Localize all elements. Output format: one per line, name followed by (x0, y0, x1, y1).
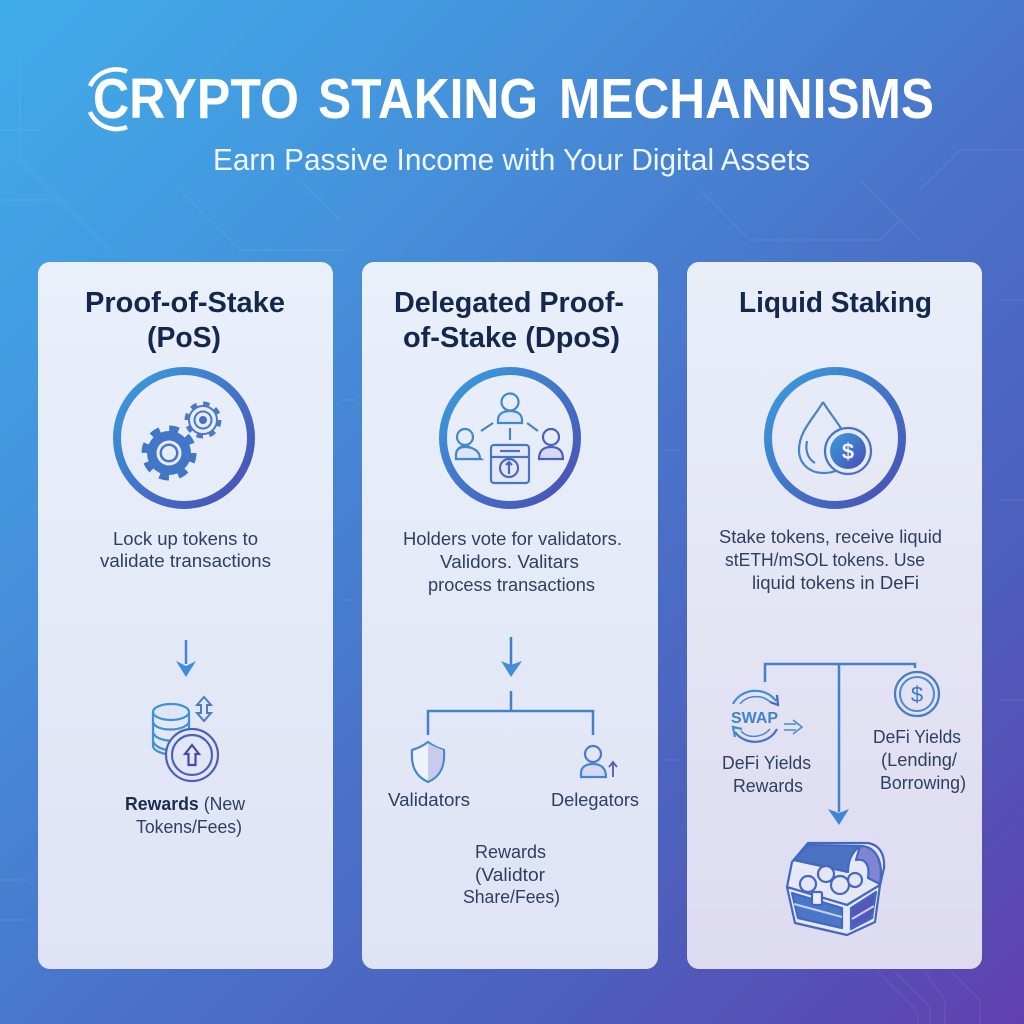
heading: Proof-of-Stake: (PoS) (147, 322, 221, 354)
heading: Delegated Proof-of-Stake: of-Stake (DpoS) (403, 322, 620, 354)
icon: treasure chest (787, 843, 884, 935)
rewards label: Rewards (475, 841, 546, 862)
panel: Liquid Staking (687, 262, 982, 969)
title (90, 67, 934, 131)
icon: swap: SWAP (731, 710, 778, 727)
description: validate transactions (100, 550, 271, 571)
description (719, 526, 942, 593)
label: DeFi yields lending: Borrowing) (880, 772, 966, 793)
rewards label (463, 841, 560, 907)
icon: dollar coin (895, 672, 939, 716)
heading: Liquid Staking: Liquid Staking (739, 287, 932, 319)
icon: droplet and dollar coin in ring (768, 371, 902, 505)
description: Stake tokens, receive liquid (719, 526, 942, 547)
label: DeFi yields rewards (722, 752, 811, 796)
icon: voters and ballot box in ring (443, 371, 577, 505)
title: CRYPTO (93, 67, 299, 131)
label: delegators: Delegators (551, 789, 639, 810)
icon: coin stack with up arrow (153, 697, 218, 781)
description (100, 528, 271, 571)
rewards label: Tokens/Fees) (136, 816, 242, 837)
icon: swap (731, 691, 802, 742)
label: validators: Validators (388, 789, 470, 810)
title: STAKING (318, 67, 538, 131)
label: DeFi yields lending (873, 726, 966, 793)
arrow (176, 640, 196, 677)
rewards label (125, 793, 246, 837)
icon: gears in ring (117, 371, 251, 505)
label: DeFi yields lending: DeFi Yields (873, 726, 961, 747)
heading: Delegated Proof-of-Stake: Delegated Proof- (394, 287, 624, 319)
description: Holders vote for validators. (403, 528, 622, 549)
branch connector with arrow (765, 664, 915, 825)
branch connector (428, 691, 593, 735)
description (403, 528, 622, 595)
title: MECHANNISMS (559, 67, 934, 131)
heading: Delegated Proof-of-Stake (394, 287, 624, 354)
panel: Delegated Proof-of-Stake (362, 262, 658, 969)
label: DeFi yields rewards: DeFi Yields (722, 752, 811, 773)
description: Validors. Valitars (440, 551, 579, 572)
label: DeFi yields rewards: Rewards (733, 775, 803, 796)
heading: Proof-of-Stake: Proof-of-Stake (85, 287, 285, 319)
icon: dollar coin: $ (911, 682, 923, 707)
icon: delegator (581, 746, 617, 777)
description: Lock up tokens to (113, 528, 258, 549)
description: process transactions (428, 574, 595, 595)
panel: Proof-of-Stake (38, 262, 333, 969)
rewards label: Rewards (New (125, 793, 246, 814)
description: stETH/mSOL tokens. Use (725, 549, 925, 570)
description: liquid tokens in DeFi (752, 572, 919, 593)
rewards label: Share/Fees) (463, 886, 560, 907)
heading: Proof-of-Stake (85, 287, 285, 354)
rewards label: (Validtor (475, 864, 545, 885)
icon: shield (412, 742, 444, 782)
subtitle: Earn Passive Income with Your Digital Assets (213, 142, 810, 177)
icon: droplet and dollar coin in ring: $ (842, 439, 854, 464)
arrow (501, 637, 522, 677)
label: DeFi yields lending: (Lending/ (881, 749, 958, 770)
